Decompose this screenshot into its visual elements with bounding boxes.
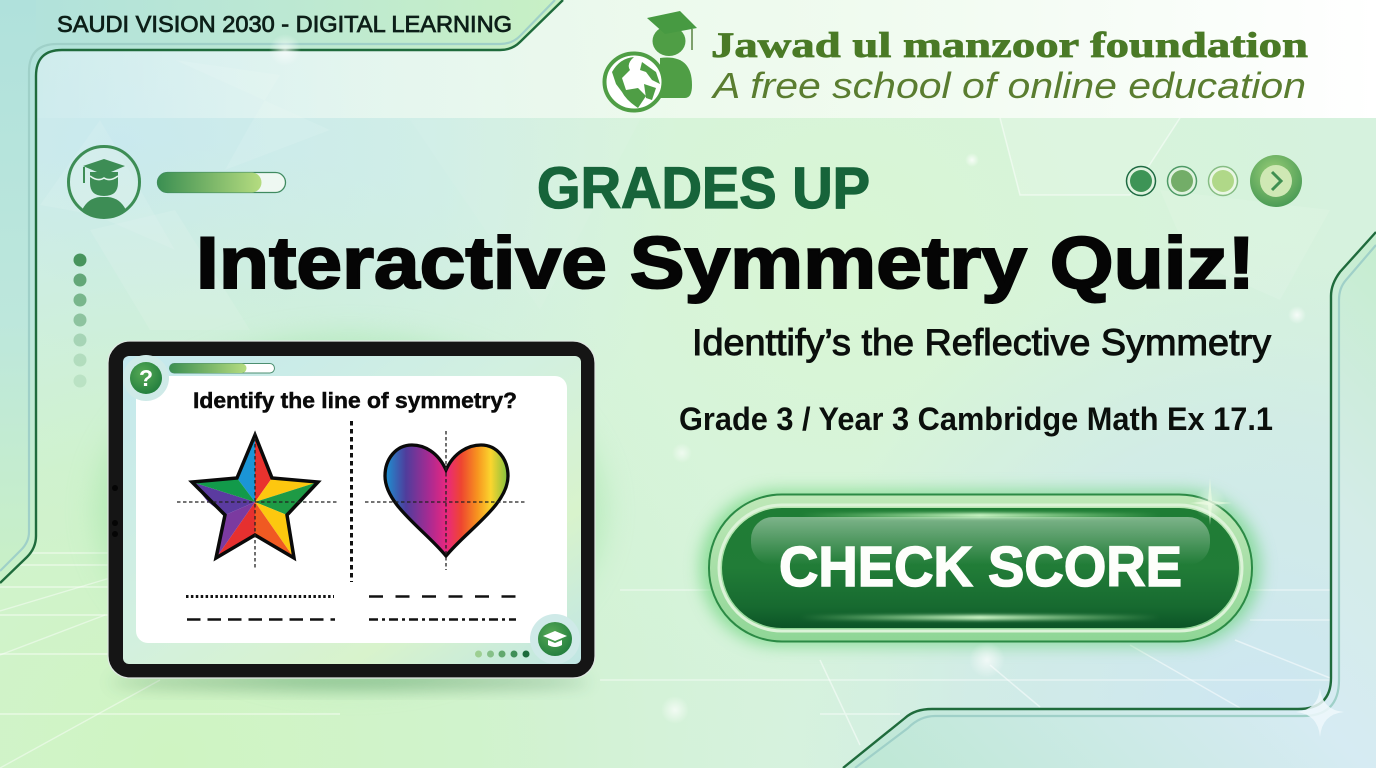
tablet body: [108, 341, 595, 678]
vertical progress dots: [74, 254, 86, 388]
quiz card: [136, 376, 567, 643]
icon: graduation cap badge: [530, 614, 580, 664]
button gloss: [751, 517, 1210, 565]
answer option: short dash line: [369, 595, 516, 598]
button shine bottom: [800, 615, 1160, 620]
grade line: Grade 3 / Year 3 Cambridge Math Ex 17.1: [679, 401, 1273, 437]
title: Interactive Symmetry Quiz!: [196, 223, 1255, 304]
check score button: [700, 478, 1261, 646]
panel: tablet quiz: [95, 335, 605, 690]
answer option: dotted line: [186, 595, 334, 598]
answer option: dash dot line: [369, 618, 516, 621]
glow sparkles: [269, 34, 1306, 724]
navigation dots and arrow: [1126, 155, 1302, 207]
button white ring: [719, 505, 1242, 631]
header banner: [0, 0, 1376, 118]
top-left badge: [30, 0, 563, 76]
button outer ring: [709, 494, 1252, 642]
logo icon: graduate: [647, 11, 697, 98]
logo: foundation: [603, 11, 1308, 112]
page dots: [475, 650, 530, 658]
button sparkle: [1190, 478, 1232, 525]
question text: Identify the line of symmetry?: [193, 388, 517, 413]
progress bar: [158, 172, 286, 192]
heading: grades up: GRADES UP: [537, 156, 870, 221]
button shine top: [800, 513, 1160, 518]
logo tagline: A free school of online education: [711, 65, 1306, 106]
answer option: long dash line: [187, 618, 335, 621]
center dotted divider: [350, 421, 353, 582]
star shape: [192, 435, 318, 558]
icon: question mark: [123, 355, 169, 401]
corner sparkle: [1296, 688, 1344, 737]
exterior strip: right and bottom: [843, 232, 1376, 768]
logo title: Jawad ul manzoor foundation: [711, 25, 1308, 65]
icon: student avatar: [68, 146, 140, 218]
button body: [722, 508, 1239, 628]
icon: question mark: ?: [139, 365, 153, 391]
logo icon: globe: [603, 52, 665, 112]
star symmetry axes: [177, 432, 338, 570]
tablet camera dots: [112, 485, 118, 537]
quiz progress bar: [170, 364, 274, 373]
heart symmetry axes: [365, 431, 525, 570]
subtitle: Identtify’s the Reflective Symmetry: [692, 322, 1272, 363]
button label: CHECK SCORE: [779, 535, 1182, 599]
exterior strip: left: [0, 0, 36, 583]
tablet screen: [123, 356, 581, 664]
badge text: SAUDI VISION 2030 - DIGITAL LEARNING: [57, 11, 512, 37]
heart shape: [385, 445, 508, 556]
icon: arrow button: [1250, 155, 1302, 207]
